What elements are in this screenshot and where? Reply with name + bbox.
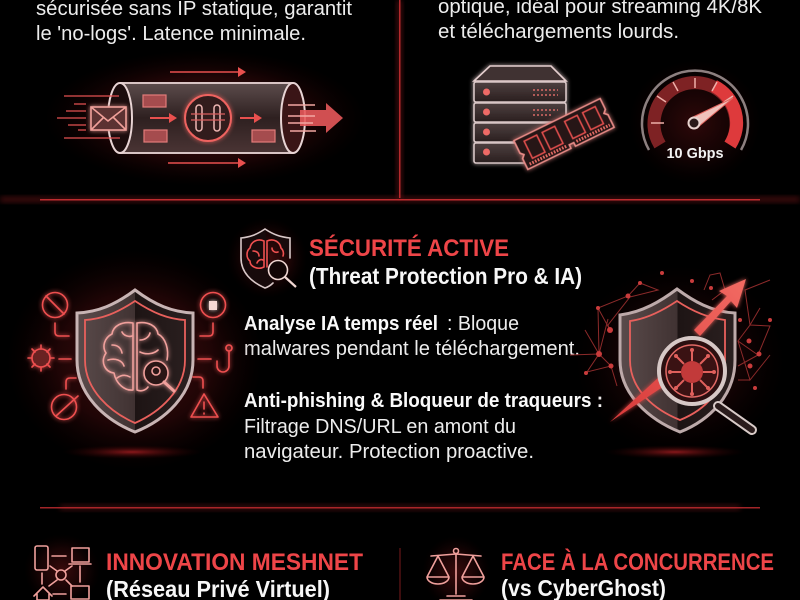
text: anti-phishing: Filtrage DNS/URL en amont du (244, 416, 516, 438)
icon: server rack (474, 66, 566, 163)
icon: scales of justice (422, 536, 490, 600)
text: anti-phishing: navigateur. Protection proactive. (244, 441, 534, 463)
text: speed description: et téléchargements lourds. (438, 21, 679, 43)
text: speed description (438, 0, 763, 43)
illustration: brain shield with threats (7, 250, 263, 470)
text: analyse IA: Analyse IA temps réel (244, 313, 438, 335)
icon: speed gauge 10 Gbps (629, 60, 761, 184)
text: anti-phishing: Anti-phishing & Bloqueur de traqueurs : (244, 390, 603, 412)
heading: innovation meshnet (106, 549, 363, 600)
heading: sécurité active: SÉCURITÉ ACTIVE (309, 234, 509, 262)
network mesh (570, 271, 772, 390)
heading: face à la concurrence (501, 548, 774, 600)
icon: RAM module (514, 99, 614, 169)
illustration: threat detection shield with rising arrow (570, 265, 785, 459)
heading: innovation meshnet: INNOVATION MESHNET (106, 549, 363, 576)
heading: sécurité active: (Threat Protection Pro & IA) (309, 263, 582, 289)
text: analyse IA (244, 313, 580, 360)
icon: encrypted tunnel (45, 50, 365, 186)
text: tunnel description (36, 0, 352, 45)
text: tunnel description: le 'no-logs'. Latence minimale. (36, 23, 306, 45)
heading: sécurité active (309, 234, 582, 289)
icon: speed gauge 10 Gbps: 10 Gbps (666, 145, 724, 162)
text: analyse IA: malwares pendant le téléchargement. (244, 338, 580, 360)
text: analyse IA: : Bloque (447, 313, 519, 335)
icon: meshnet network (24, 534, 100, 600)
icon: shield with brain and magnifier (227, 218, 307, 298)
text: anti-phishing (244, 390, 603, 463)
